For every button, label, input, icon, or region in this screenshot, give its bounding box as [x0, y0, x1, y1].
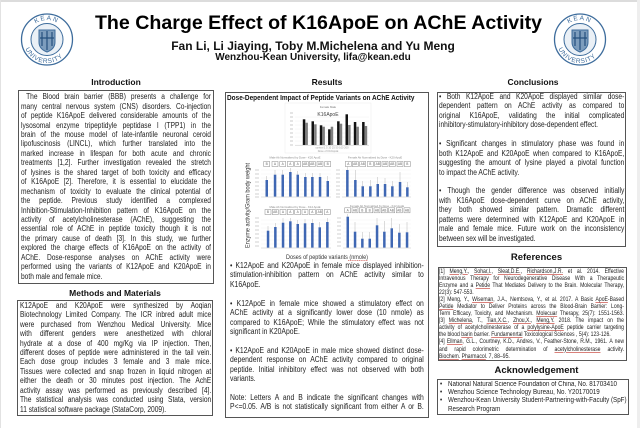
- bar chart: male K20ApoE: AB: [303, 162, 307, 166]
- icon: Kean University seal, right: KEAN: [567, 16, 591, 24]
- bar chart: female K20ApoE: AB: [376, 162, 380, 166]
- introduction text: activity of acetylcholinesterase (AChE), suggesting the: [21, 215, 211, 224]
- y axis label: Enzyme activity/Gram body weight: [244, 163, 252, 248]
- conclusions text: • Significant changes in stimulatory phase was found in: [439, 139, 624, 148]
- bar chart: male K20ApoE: A: [282, 162, 285, 166]
- conclusions text: between sex will be investigated.: [439, 234, 536, 243]
- bar chart: female K20ApoE: AB: [398, 162, 402, 166]
- bar chart: K16ApoE: Female Male: [320, 105, 337, 109]
- bar chart: male K20ApoE: [255, 156, 331, 197]
- bar chart: male K20ApoE: A: [274, 162, 277, 166]
- conclusions text: they both showed similar pattern. Dramatic different: [439, 205, 624, 214]
- heading: Introduction: Introduction: [91, 77, 141, 87]
- panel: references: [438, 266, 626, 360]
- references list: [2] Meng, Y., Wiseman, J.A., Nemtsova, Y., et al. 2017. A Basic ApoE-Based: [439, 296, 624, 303]
- panel: introduction: [18, 90, 214, 284]
- introduction text: Inhibition-Stimulation-Inhibition pattern of K16ApoE on the: [21, 206, 211, 215]
- bar chart: female K20ApoE: AB: [361, 162, 365, 166]
- introduction text: many central nervous system (CNS) disorders. Co-injection: [21, 102, 211, 111]
- bar chart: female K12ApoE: AB: [397, 208, 401, 212]
- bar chart: male K12ApoE: AB: [318, 210, 322, 214]
- bar chart: male K20ApoE: Male Ab Normalized by Dose - K20 ApoE: [270, 156, 321, 160]
- bar chart: male K12ApoE: B: [267, 210, 269, 214]
- results findings text: stimulation-inhibition pattern on AChE activity similar to: [230, 270, 424, 279]
- methods text: either the death or 30 minutes post injection. The AchE: [20, 376, 211, 385]
- results findings text: • K12ApoE and K20ApoE in male mice showed distinct dose-: [230, 346, 424, 355]
- references list: [1] Meng,Y., Sohar,I., Sleat,D.E., Richardson,J.R. et al. 2014. Effective: [439, 268, 624, 274]
- x axis label: Doses of peptide variants (nmole): [286, 254, 368, 261]
- bar chart: female K20ApoE: B: [369, 162, 371, 166]
- results findings text: peptide. Initial inhibitory effect was not observed with both: [230, 365, 424, 374]
- introduction text: of K16ApoE [2]. Therefore, it is essential to elucidate the: [21, 177, 211, 186]
- bar chart: female K12ApoE: AB: [390, 208, 394, 212]
- bar chart: male K20ApoE: AB: [310, 162, 314, 166]
- heading: Results: Results: [312, 77, 342, 87]
- results subheading: Dose-Dependent Impact of Peptide Variants on AChE Activity: [227, 93, 414, 102]
- bar chart: male K20ApoE: B: [266, 162, 268, 166]
- results findings text: P<=0.05. A/B is not statistically significant from either A or B.: [230, 402, 424, 411]
- methods text: were purchased from Wenzhou Medical University. Mice: [20, 320, 211, 329]
- conclusions text: dependent pattern on AChE activity as compared to: [439, 101, 624, 110]
- references list: 22(3): 547-553.: [439, 289, 474, 296]
- bar chart: male K12ApoE: AB: [273, 210, 277, 214]
- results findings text: dependent response on AChE activity compared to original: [230, 355, 424, 364]
- bar chart: female K20ApoE: [336, 156, 411, 197]
- references list: [3] Michelena, T., Tian,X.C., Zhou,X., Meng,Y. 2018. The impact on the: [439, 317, 624, 324]
- bar chart: female K12ApoE: A: [347, 208, 350, 212]
- introduction text: treatments [1,2]. Further investigation revealed the stretch: [21, 158, 211, 167]
- heading: References: References: [511, 252, 562, 263]
- heading: Conclusions: Conclusions: [507, 77, 558, 87]
- conclusions text: • Though the gender difference was observed initially: [439, 186, 624, 195]
- icon: Kean University seal, left: [20, 13, 74, 66]
- introduction text: of peptide K16ApoE delivered considerable amounts of the: [21, 111, 211, 120]
- bar chart: male K20ApoE: B: [327, 162, 329, 166]
- bar chart: female K12ApoE: B: [369, 208, 371, 212]
- results findings text: variants.: [230, 374, 256, 383]
- introduction text: lipofuscinosis (LINCL), which further translated into the: [21, 139, 211, 148]
- icon: Kean University seal, right: [554, 13, 606, 66]
- references list: and rapid colorimetric determination of acetylcholinesterase activity.: [439, 346, 624, 353]
- references list: the blood barin barrier. Fundamenrtal Toxicological Sciences , 5(4): 123-126.: [439, 331, 611, 338]
- bar chart: male K12ApoE: A: [326, 210, 329, 214]
- conclusions text: inhibitory-stimulatory-inhibitory dose-dependent effect.: [439, 120, 598, 129]
- introduction text: essential role of AChE in peptide toxicity though it is not: [21, 224, 211, 233]
- results findings text: compared to K16ApoE; While the stimulatory effect was not: [230, 318, 424, 327]
- bar chart: female K20ApoE: AB: [353, 162, 357, 166]
- bar chart: female K20ApoE: B: [406, 162, 408, 166]
- bar chart: male K20ApoE: AB: [318, 162, 322, 166]
- methods text: Each dose group includes 3 female and 3 male mice.: [20, 357, 211, 366]
- results findings text: significant in K20ApoE.: [230, 327, 300, 336]
- window edge: right: [637, 0, 640, 428]
- methods text: with different genders were anesthetized with chloral: [20, 329, 211, 338]
- panel: methods and materials: [17, 300, 213, 416]
- introduction text: explored the charge effects of K16ApoE on the activity of: [21, 243, 211, 252]
- heading: Methods and Materials: Methods and Materials: [69, 288, 161, 298]
- bar chart: female K12ApoE: AB: [375, 208, 379, 212]
- panel: results: [225, 92, 429, 418]
- acknowledgement list: Wenzhou Science Technology Bureau, No. Y20170019: [448, 389, 600, 396]
- references list: Petide Mediator to Deliver Proteins across the Blood-Brain Barrier: Long-: [439, 303, 624, 310]
- panel: acknowledgement: [437, 379, 629, 415]
- acknowledgement list: Research Program: [448, 406, 500, 413]
- acknowledgement list: National Natural Science Foundation of China, No. 81703410: [448, 380, 617, 388]
- bar chart: male K20ApoE: A: [289, 162, 292, 166]
- bar chart: male K12ApoE: A: [304, 210, 307, 214]
- bar chart: K16ApoE: control 1 5 10 25 50 100 200: [315, 146, 349, 150]
- heading: Acknowledgement: Acknowledgement: [495, 365, 578, 376]
- introduction text: lysosomal enzyme tripeptidyle peptidase I (TPP1) in the: [21, 121, 211, 130]
- icon: Kean University seal, right: UNIVERSITY: [559, 47, 594, 63]
- conclusions text: with K16ApoE dose-dependent curve on AChE activity,: [439, 196, 624, 205]
- bar chart: K16ApoE: Dose of K16ApoE: [318, 149, 339, 153]
- window edge: left: [0, 0, 1, 428]
- conclusions text: male and female mice. Future work on the inconsistency: [439, 224, 624, 233]
- results findings text: • K12ApoE in female mice showed a stimulatory effect on: [230, 299, 424, 308]
- results findings text: AChE activity at a significantly lower dose (10 nmole) as: [230, 308, 424, 317]
- acknowledgement list: •: [440, 380, 442, 388]
- bar chart: K16ApoE: K16ApoE: [317, 112, 339, 118]
- window edge: top: [0, 0, 640, 2]
- authors: Fan Li, Li Jiaying, Toby M.Michelena and Yu Meng: [171, 39, 455, 53]
- methods text: hydrate at a dose of 400 mg/Kg via IP injection. Then,: [20, 339, 211, 348]
- introduction text: marked increase in lifespan for both acute and chronic: [21, 149, 211, 158]
- methods text: different doses of peptide were administered in the tail vein.: [20, 348, 211, 357]
- bar chart: female K12ApoE: AB: [382, 208, 386, 212]
- methods text: [20, 301, 212, 414]
- references list: Biochem. Pharmacol. 7, 88–95.: [439, 353, 510, 360]
- references list: Term Efficacy, Toxicity, and Mechanism. Molecuar Therapy, 25(7): 1551-1563.: [439, 310, 624, 317]
- introduction text: mechanism of toxicity to evaluate the clinical potential of: [21, 187, 211, 196]
- title: The Charge Effect of K16ApoE on AChE Activity: [95, 12, 542, 34]
- icon: Kean University seal, left: KEAN: [34, 16, 58, 24]
- methods text: K12ApoE and K20ApoE were synthesized by Aoqian: [20, 301, 211, 310]
- results findings text: Note: Letters A and B indicate the significant changes with: [230, 393, 424, 402]
- bar chart: K16ApoE: [285, 103, 371, 153]
- bar chart: female K20ApoE: AB: [383, 162, 387, 166]
- bar chart: female K12ApoE: [337, 204, 411, 248]
- methods text: Tissues were collected and snap frozen in liquid nitrogen at: [20, 367, 211, 376]
- conclusions text: suggesting the amount of lysine played a pivotal function: [439, 158, 624, 167]
- introduction text: both male and female mice.: [21, 272, 102, 281]
- conclusions text: original K16ApoE, validating the initial complicated: [439, 111, 624, 120]
- bar chart: male K12ApoE: A: [311, 210, 314, 214]
- introduction text: the primary cause of death [3]. In this study, we further: [21, 234, 211, 243]
- bar chart: female K12ApoE: AB: [353, 208, 357, 212]
- bar chart: male K12ApoE: A: [282, 210, 285, 214]
- references list: activity of acetylcholinesterase of a polylysine-ApoE peptide carrier targeting: [439, 324, 624, 331]
- conclusions text: to impact the AChE activity.: [439, 168, 519, 176]
- conclusions text: • Both K12ApoE and K20ApoE displayed similar dose-: [439, 92, 624, 101]
- introduction text: AChE. Dose-response analyses on AChE activity were: [21, 253, 211, 262]
- references list: Enzyme and a Petide That Mediates Delivery to the Brain. Molecular Therapy,: [439, 282, 624, 289]
- acknowledgement list: •: [440, 389, 442, 396]
- panel: conclusions: [437, 92, 626, 247]
- icon: Kean University seal, left: UNIVERSITY: [26, 47, 62, 63]
- bar chart: female K20ApoE: A: [347, 162, 350, 166]
- bar chart: female K12ApoE: AB: [405, 208, 409, 212]
- bar chart: male K12ApoE: A: [297, 210, 300, 214]
- bar chart: female K20ApoE: Female Ab Normalized by Dose - K20 ApoE: [348, 156, 402, 160]
- introduction text: of lysines is the shared target of both toxicity and efficacy: [21, 168, 211, 177]
- acknowledgement list: •: [440, 397, 442, 404]
- figure: dose response charts: [244, 102, 411, 261]
- methods text: Biotechnology Limited Company. The ICR inbred adult mice: [20, 310, 211, 319]
- methods text: activity assay was performed as previously described [4].: [20, 386, 211, 395]
- introduction text: performed using the variants of K12ApoE and K20ApoE in: [21, 262, 211, 271]
- references list: [439, 268, 624, 360]
- references list: [4] Ellman, G.L., Courtney, K.D., Andres, V., Feather-Stone, R.M., 1961. A new: [439, 338, 624, 345]
- references list: Intravenous Therapy for Neurodegenerative Disease With a Therapeutic: [439, 275, 624, 282]
- introduction text: [21, 92, 211, 281]
- conclusions text: both K12ApoE and K20ApoE when compared to K16ApoE,: [439, 149, 624, 158]
- acknowledgement list: Wenzhou-Kean University Student-Partnering-with-Faculty (SpF): [448, 397, 627, 404]
- introduction text: The Blood brain barrier (BBB) presents a challenge for: [26, 92, 211, 101]
- results findings text: K16ApoE.: [230, 280, 261, 289]
- bar chart: male K12ApoE: [255, 205, 331, 248]
- bar chart: female K20ApoE: AB: [390, 162, 394, 166]
- bar chart: male K20ApoE: A: [297, 162, 300, 166]
- results findings text: [230, 261, 424, 411]
- acknowledgement list: [440, 380, 627, 413]
- conclusions text: patterns were determined with K12ApoE and K20ApoE in: [439, 215, 624, 224]
- bar chart: male K12ApoE: A: [289, 210, 292, 214]
- affiliation: Wenzhou-Kean University, lifa@kean.edu: [215, 52, 411, 63]
- introduction text: the peptide. Previous study identified a complexed: [21, 196, 211, 205]
- methods text: 11 statistical software package (StataCorp, 2009).: [20, 405, 166, 414]
- bar chart: female K12ApoE: B: [361, 208, 363, 212]
- methods text: The statistical analysis was conducted using Stata, version: [20, 395, 211, 404]
- bar chart: male K12ApoE: Male Ab Normalized by Dose - K12 ApoE: [270, 205, 321, 209]
- conclusions text: [439, 92, 624, 243]
- bar chart: female K12ApoE: Female Ab Normalized by Dose - K12 ApoE: [350, 204, 404, 208]
- introduction text: brain of the mouse model of late-infantile neuronal ceroid: [21, 130, 211, 139]
- results findings text: • K12ApoE and K20ApoE in female mice displayed inhibition-: [230, 261, 424, 270]
